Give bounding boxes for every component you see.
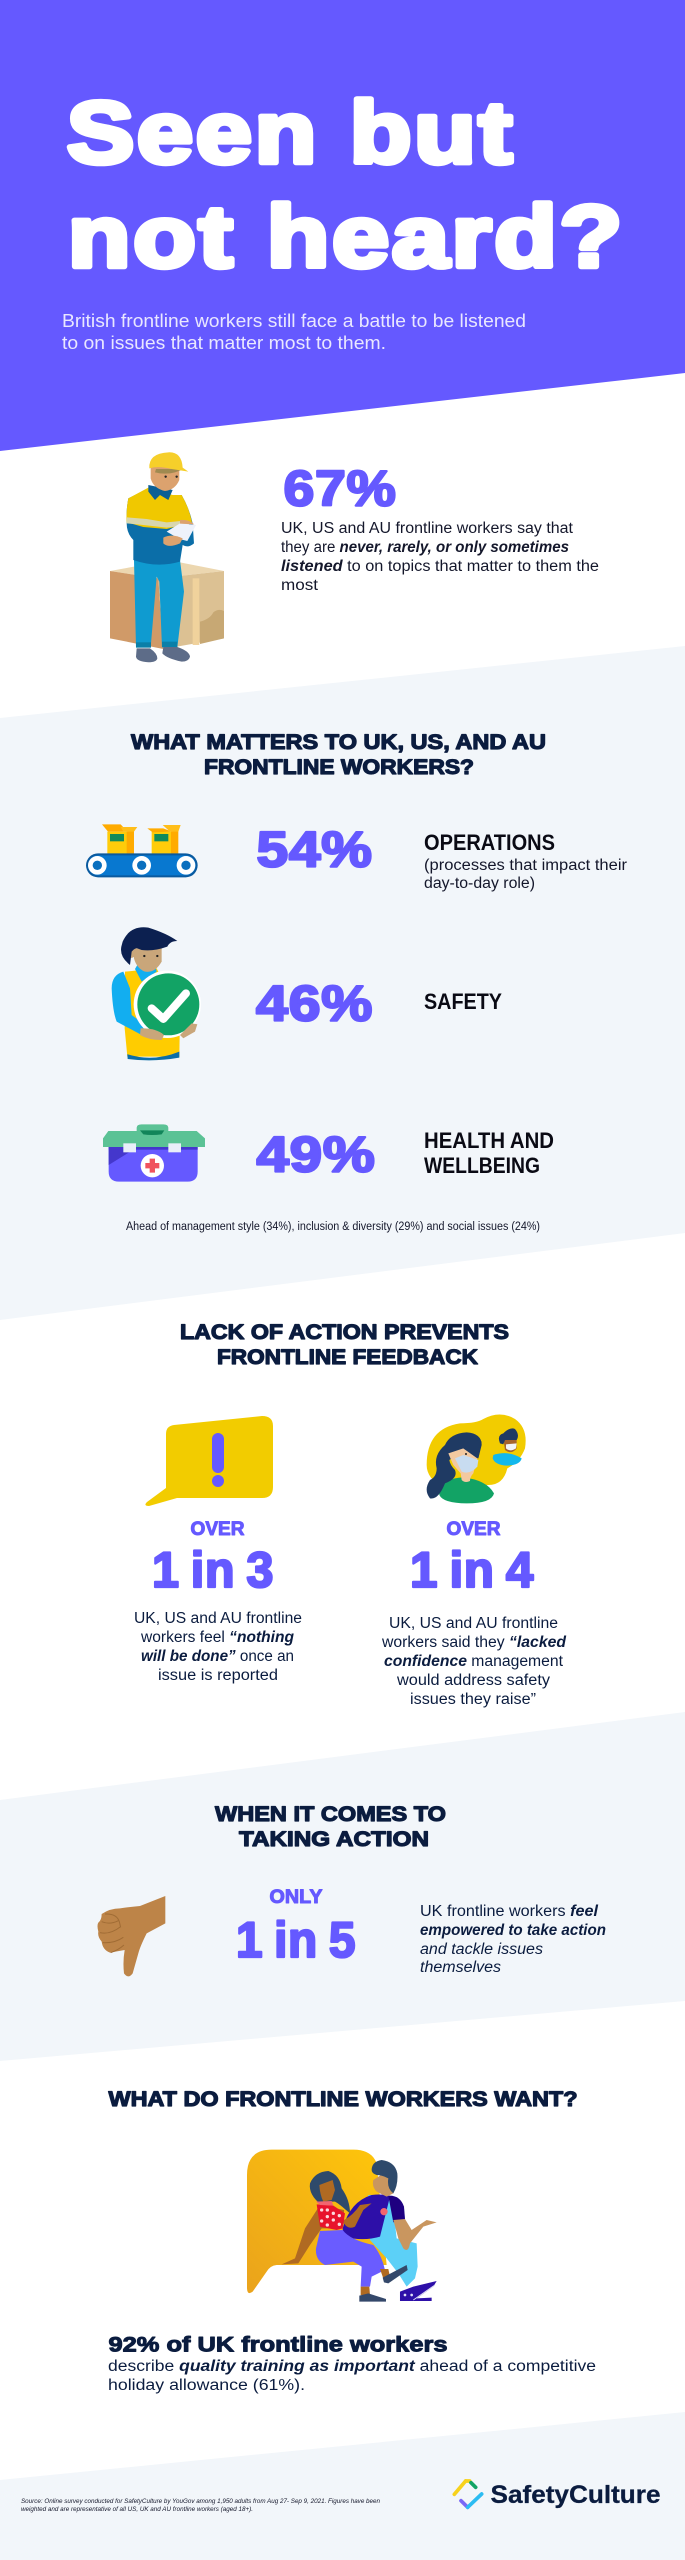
- title: Seen but: [67, 84, 515, 182]
- description: UK, US and AU frontline: [134, 1610, 302, 1627]
- callout: 92 percent: [108, 2334, 596, 2394]
- label: health and wellbeing: [424, 1128, 554, 1178]
- description: UK, US and AU frontline: [389, 1615, 558, 1632]
- label: over: OVER: [446, 1519, 501, 1540]
- logo: SafetyCulture: SafetyCulture: [490, 2481, 661, 2509]
- panel: what workers want: [108, 2088, 596, 2394]
- description: themselves: [420, 1959, 501, 1976]
- label: operations: [424, 830, 627, 892]
- description: UK, US and AU frontline workers say that: [281, 520, 574, 537]
- label: operations: day-to-day role): [424, 875, 535, 892]
- label: health and wellbeing: WELLBEING: [424, 1153, 540, 1178]
- description: and tackle issues: [420, 1941, 543, 1958]
- heading: FRONTLINE WORKERS?: [204, 756, 474, 779]
- title: not heard?: [68, 188, 625, 286]
- panel: what matters: [0, 646, 685, 1320]
- column: over 1 in 4: [381, 1414, 567, 1708]
- number: 54%: 54%: [256, 822, 372, 878]
- big number: 67%: 67%: [284, 460, 396, 516]
- panel: taking action: [0, 1712, 685, 2061]
- heading: TAKING ACTION: [239, 1828, 429, 1851]
- number: 1 in 5: 1 in 5: [236, 1912, 356, 1968]
- source note: Source: Online survey conducted for SafetyCulture by YouGov among 1,950 adults from Aug 27- Sep 9, 2021. Figures have been: [21, 2498, 380, 2505]
- label: health and wellbeing: HEALTH AND: [424, 1128, 554, 1153]
- panel: lack of action: [134, 1321, 567, 1708]
- icon: speech bubble with exclamation: [145, 1416, 273, 1506]
- heading: WHAT DO FRONTLINE WORKERS WANT?: [108, 2088, 578, 2111]
- heading: WHAT MATTERS TO UK, US, AND AU: [131, 731, 546, 754]
- description: issues they raise”: [410, 1691, 536, 1708]
- description: [281, 520, 599, 594]
- subtitle: to on issues that matter most to them.: [62, 333, 386, 353]
- label: operations: (processes that impact their: [424, 857, 627, 874]
- description: [134, 1610, 302, 1684]
- description: listened to on topics that matter to them the: [281, 558, 599, 575]
- number: 1 in 3: 1 in 3: [152, 1542, 274, 1598]
- description: would address safety: [396, 1672, 550, 1689]
- heading: [215, 1803, 446, 1851]
- icon: two masked people: [427, 1414, 526, 1503]
- subtitle: [62, 311, 526, 353]
- description: most: [281, 577, 319, 594]
- description: workers feel “nothing: [140, 1629, 295, 1646]
- row: safety: [112, 927, 502, 1060]
- label: safety: SAFETY: [424, 989, 502, 1014]
- description: they are never, rarely, or only sometimes: [281, 539, 569, 556]
- description: [420, 1903, 606, 1976]
- label: only: ONLY: [270, 1887, 323, 1908]
- row: operations: [86, 822, 627, 892]
- callout: 92 percent: 92% of UK frontline workers: [108, 2334, 448, 2356]
- description: confidence management: [384, 1653, 564, 1670]
- source note: [21, 2498, 380, 2513]
- panel: footer: [0, 2412, 685, 2560]
- row: health and wellbeing: [103, 1124, 554, 1182]
- callout: 92 percent: describe quality training as important ahead of a competitive: [108, 2358, 596, 2375]
- source note: weighted and are representative of all US, UK and AU frontline workers (aged 18+).: [21, 2506, 253, 2513]
- subtitle: British frontline workers still face a battle to be listened: [62, 311, 526, 331]
- title: [67, 84, 625, 286]
- icon: first aid kit: [103, 1124, 205, 1182]
- number: 1 in 4: 1 in 4: [410, 1542, 534, 1598]
- icon: conveyor belt: [86, 824, 198, 877]
- description: empowered to take action: [420, 1922, 606, 1939]
- number: 46%: 46%: [256, 976, 373, 1032]
- heading: [180, 1321, 509, 1369]
- description: workers said they “lacked: [381, 1634, 567, 1651]
- label: over: OVER: [190, 1519, 245, 1540]
- description: [381, 1615, 567, 1708]
- footnote: Ahead of management style (34%), inclusion & diversity (29%) and social issues (24%): [126, 1221, 540, 1233]
- label: operations: OPERATIONS: [424, 830, 555, 855]
- heading: WHEN IT COMES TO: [215, 1803, 446, 1826]
- panel: hero header: [0, 0, 685, 451]
- icon: worker holding check mark: [112, 927, 201, 1060]
- description: UK frontline workers feel: [420, 1903, 599, 1920]
- heading: [131, 731, 546, 779]
- illustration: two workers on speech bubble: [247, 2150, 437, 2302]
- column: over 1 in 3: [134, 1416, 302, 1684]
- icon: thumbs down: [97, 1896, 165, 1976]
- panel: 67 percent statistic: [110, 452, 599, 662]
- icon: worker with tablet on box: [110, 452, 224, 662]
- number: 49%: 49%: [256, 1126, 376, 1182]
- heading: LACK OF ACTION PREVENTS: [180, 1321, 509, 1344]
- description: will be done” once an: [141, 1648, 294, 1665]
- heading: FRONTLINE FEEDBACK: [217, 1346, 478, 1369]
- callout: 92 percent: holiday allowance (61%).: [108, 2377, 305, 2394]
- description: issue is reported: [158, 1667, 278, 1684]
